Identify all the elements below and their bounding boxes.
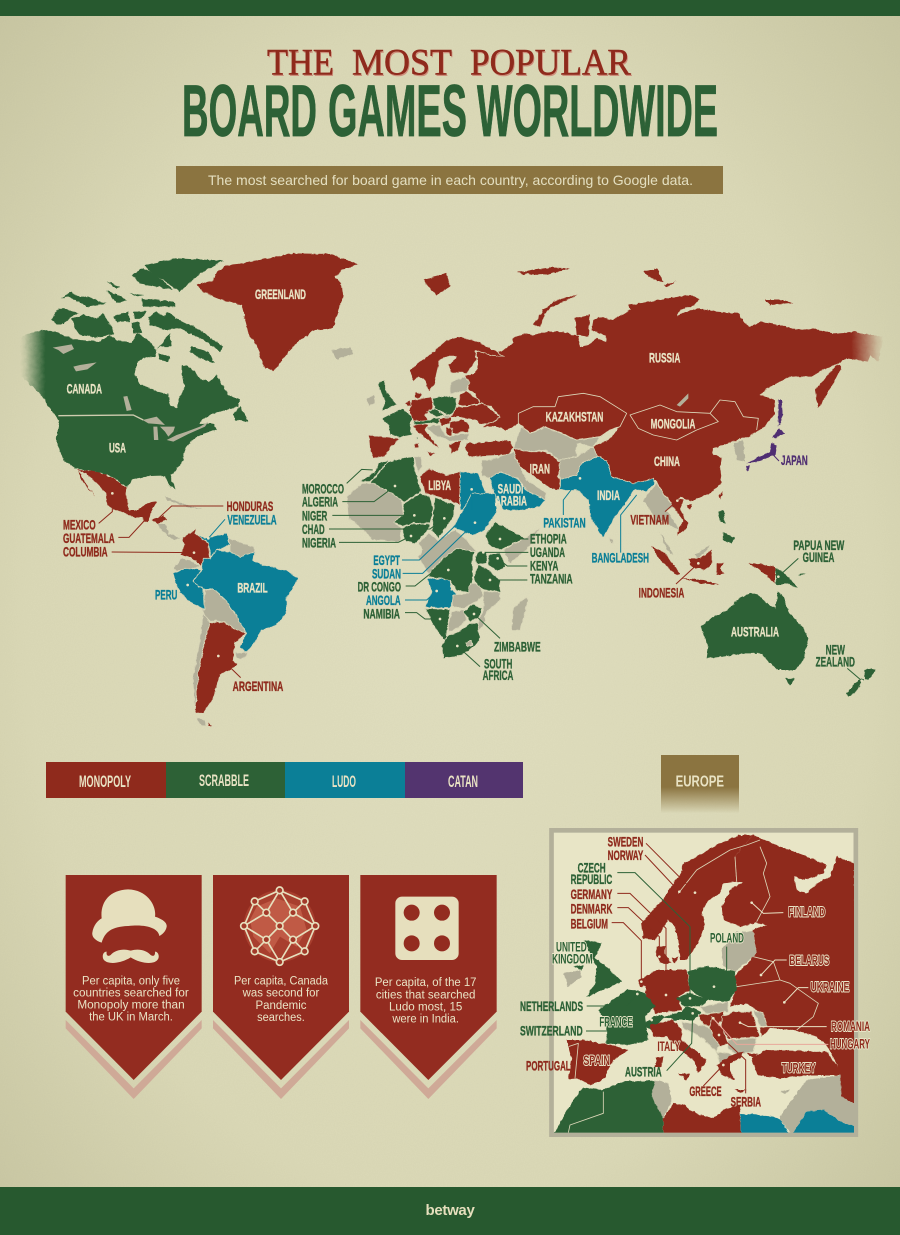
label: Algeria (302, 485, 396, 510)
label: Finland (750, 901, 825, 920)
legend: Catan: CATAN (448, 773, 478, 791)
icon: bowler hat and moustache (92, 889, 167, 963)
label: Egypt: EGYPT (373, 553, 400, 568)
legend: Scrabble (166, 762, 285, 798)
label: Libya: LIBYA (428, 478, 451, 493)
title line one (267, 42, 632, 85)
label: Poland: POLAND (710, 931, 744, 946)
title line two: GAMES (328, 71, 467, 152)
Japan (746, 400, 785, 472)
Arctic islands of Russia (517, 267, 842, 408)
label: New Zealand (816, 642, 863, 682)
banner text: countries searched for (73, 986, 189, 1000)
label: Angola (366, 590, 438, 608)
banner text (375, 975, 477, 1026)
Europe heading tab (661, 755, 739, 813)
title line one: POPULAR (471, 44, 632, 85)
banner text: Per capita, of the 17 (375, 975, 477, 989)
title line one: POPULAR (470, 42, 631, 84)
land: France (598, 990, 655, 1045)
label: Belgium (571, 916, 643, 983)
land: Belgium (638, 976, 648, 987)
label: Kenya (496, 557, 558, 573)
Europe inset (520, 755, 870, 1137)
label: Zimbabwe (473, 613, 541, 655)
land: Hungary, Romania, Serbia (698, 1012, 760, 1047)
label: Italy: ITALY (657, 1039, 680, 1054)
title line one: MOST (352, 42, 452, 84)
label: Japan (773, 453, 808, 468)
title line one: THE (267, 42, 334, 84)
legend: Catan (405, 762, 523, 798)
label: DR Congo (358, 569, 450, 595)
subtitle band (176, 166, 723, 194)
land: Sub-Saharan Africa overview (347, 483, 540, 658)
Russia, Kazakhstan, Mongolia, China (465, 295, 883, 505)
label: Pakistan: PAKISTAN (543, 516, 586, 531)
land: Tunisia (652, 1080, 672, 1118)
land: Slovakia, Balkans, Moldova (682, 1002, 767, 1063)
banner text (234, 974, 328, 1024)
label: Finland: FINLAND (788, 905, 825, 920)
Arctic islands (52, 258, 248, 422)
label: Guatemala: GUATEMALA (63, 531, 115, 546)
title line one: THE (268, 44, 335, 85)
Greenland (197, 253, 358, 372)
Central and West Asia (513, 423, 655, 544)
label: Venezuela (207, 512, 277, 540)
label: Algeria: ALGERIA (302, 495, 338, 510)
Iceland (332, 347, 353, 359)
legend: Ludo: LUDO (332, 773, 356, 791)
banner text: Per capita, Canada (234, 974, 328, 988)
land: Egypt and Saudi Arabia (741, 1110, 857, 1135)
label: Nigeria: NIGERIA (302, 536, 336, 551)
Europe land (554, 835, 857, 1135)
legend: Monopoly: MONOPOLY (79, 773, 131, 791)
label: Argentina (217, 655, 283, 694)
world map (22, 252, 882, 726)
label: Egypt (373, 488, 473, 568)
label: Chad (302, 517, 446, 537)
label: Japan: JAPAN (781, 453, 808, 468)
label: Iran: IRAN (530, 461, 550, 476)
lakes and Canada-USA border (53, 344, 208, 442)
label: Uganda (482, 545, 565, 560)
label: Saudi Arabia: SAUDI (498, 481, 523, 496)
banner: Pandemic fact (213, 875, 349, 1099)
label: Romania (739, 1019, 870, 1034)
label: Romania: ROMANIA (831, 1019, 870, 1034)
label: DR Congo: DR CONGO (358, 580, 401, 595)
label: Papua New Guinea: PAPUA NEW (793, 538, 844, 553)
banner: Monopoly fact (66, 875, 202, 1099)
label: Australia: AUSTRALIA (731, 625, 779, 640)
label: Switzerland (520, 1019, 653, 1039)
label: Bangladesh (592, 495, 649, 566)
label: Ukraine (783, 980, 849, 1004)
label: Niger (302, 508, 416, 523)
label: Mexico (63, 492, 114, 532)
label: Mexico: MEXICO (63, 517, 96, 532)
label: Portugal: PORTUGAL (526, 1058, 571, 1073)
land: Greenland, Latin America (76, 253, 450, 727)
label: Papua New Guinea (777, 538, 844, 578)
label: Ethiopia: ETHOPIA (530, 532, 567, 547)
South-East Asia (643, 440, 775, 585)
European borders (568, 840, 818, 1133)
banner text: Per capita, only five (82, 973, 180, 987)
land: Asia and Oceania (465, 267, 883, 697)
subtitle band: The most searched for board game in each country, according to Google data. (208, 172, 693, 188)
title (176, 42, 723, 194)
label: Sweden: SWEDEN (608, 835, 643, 850)
Svalbard (423, 273, 450, 295)
label: Austria (625, 1012, 694, 1080)
land: Libya (663, 1103, 741, 1135)
label: Mongolia: MONGOLIA (651, 417, 695, 432)
banner text: Ludo most, 15 (389, 999, 463, 1013)
icon: globe with network (241, 887, 319, 965)
label: Indonesia: INDONESIA (639, 585, 684, 600)
label: Denmark: DENMARK (571, 901, 612, 916)
label: Vietnam (630, 499, 679, 527)
label: France: FRANCE (599, 1015, 633, 1030)
land: Denmark (657, 947, 678, 963)
Europe frame (551, 830, 856, 1135)
South America (172, 528, 298, 727)
label: Turkey: TURKEY (782, 1060, 816, 1075)
label: Argentina: ARGENTINA (233, 679, 283, 694)
label: Serbia: SERBIA (731, 1095, 761, 1110)
banner text: the UK in March. (89, 1010, 173, 1024)
country labels: Asia, east Africa, Oceania (456, 351, 863, 683)
land: Morocco and Algeria (554, 1081, 663, 1135)
land: Switzerland, Austria, Czech Republic (643, 993, 708, 1030)
banner text: Pandemic (255, 998, 307, 1012)
label: United Kingdom: UNITED (556, 940, 587, 955)
banner text (73, 973, 189, 1024)
label: Morocco: MOROCCO (302, 481, 344, 496)
title line one: MOST (353, 44, 453, 85)
label: Hungary (712, 1017, 870, 1051)
label: Hungary: HUNGARY (830, 1036, 870, 1051)
label: Honduras (157, 499, 273, 520)
label: Vietnam: VIETNAM (630, 512, 669, 527)
land: Ireland (563, 970, 582, 987)
banner text: was second for (242, 986, 319, 1000)
label: Brazil: BRAZIL (237, 581, 268, 596)
top bar (0, 0, 900, 16)
Papua New Guinea (775, 567, 807, 588)
land: Baltic states (722, 932, 757, 972)
label: Greece: GREECE (689, 1084, 722, 1099)
label: Venezuela: VENEZUELA (227, 512, 277, 527)
label: Indonesia (639, 562, 700, 600)
label: Kenya: KENYA (530, 558, 558, 573)
land: Finland, Russia, Belarus, Ukraine (722, 835, 857, 1105)
legend: Ludo (285, 762, 405, 798)
country labels: Americas and Africa (63, 287, 476, 694)
label: Belgium: BELGIUM (571, 916, 608, 931)
footer bar with logo: betway (425, 1202, 475, 1219)
label: Bangladesh: BANGLADESH (592, 551, 649, 566)
label: Russia: RUSSIA (649, 351, 680, 366)
label: India: INDIA (597, 488, 620, 503)
label: Saudi Arabia (495, 481, 527, 509)
label: South Africa: SOUTH (484, 656, 512, 671)
land: Greece (717, 1052, 747, 1093)
legend: Scrabble: SCRABBLE (199, 772, 249, 790)
land: Turkey (747, 1050, 840, 1078)
label: Morocco (302, 469, 375, 496)
label: Peru: PERU (155, 587, 177, 602)
label: Ukraine: UKRAINE (811, 980, 849, 995)
banner text: searches. (257, 1010, 305, 1024)
label: Netherlands (520, 993, 639, 1014)
banner: Ludo fact (360, 875, 497, 1099)
label: Columbia: COLUMBIA (63, 545, 108, 560)
Australia and New Zealand (701, 592, 876, 697)
land: Germany (645, 970, 690, 1013)
label: Spain: SPAIN (583, 1053, 610, 1068)
legend (46, 762, 523, 798)
label: South Africa (456, 645, 513, 683)
label: Greenland: GREENLAND (255, 287, 306, 302)
label: Honduras: HONDURAS (227, 499, 273, 514)
label: Tanzania: TANZANIA (530, 572, 573, 587)
label: Belarus: BELARUS (789, 953, 829, 968)
label: Namibia: NAMIBIA (363, 606, 400, 621)
label: USA: USA (109, 440, 126, 455)
banner text: were in India. (391, 1012, 459, 1026)
label: Greece (689, 1064, 725, 1099)
label: Angola: ANGOLA (366, 593, 401, 608)
label: Niger: NIGER (302, 508, 327, 523)
label: Kazakhstan: KAZAKHSTAN (546, 410, 603, 425)
label: United Kingdom: KINGDOM (552, 952, 593, 967)
label: Sudan: SUDAN (372, 566, 401, 581)
label: New Zealand: NEW (826, 642, 845, 657)
land: Sweden and Norway (642, 835, 753, 960)
label: Nigeria (302, 535, 412, 551)
icon: dice (395, 897, 459, 960)
country borders in Asia (518, 393, 758, 440)
label: United Kingdom (552, 940, 593, 967)
land: Italy (650, 1020, 707, 1080)
label: Sweden (608, 835, 696, 894)
label: Netherlands: NETHERLANDS (520, 999, 583, 1014)
Europe heading tab: EUROPE (676, 774, 724, 791)
label: Chad: CHAD (302, 522, 325, 537)
label: Germany (571, 887, 667, 996)
land: Europe, Middle East, North Africa overview (360, 337, 547, 510)
label: Norway: NORWAY (608, 848, 643, 863)
title line two: BOARD (182, 71, 317, 152)
land: United Kingdom (573, 940, 622, 997)
label: Sudan (372, 521, 476, 581)
label: Uganda: UGANDA (530, 545, 565, 560)
label: Guatemala (63, 520, 145, 546)
label: Austria: AUSTRIA (625, 1065, 662, 1080)
label: Saudi Arabia: ARABIA (495, 494, 527, 509)
label: Papua New Guinea: GUINEA (803, 550, 834, 565)
label: Zimbabwe: ZIMBABWE (494, 640, 541, 655)
banner text: Monopoly more than (77, 998, 185, 1012)
label: Ethiopia (499, 532, 567, 547)
Lake Baikal (677, 393, 688, 407)
label: Norway (608, 848, 681, 893)
legend: Monopoly (46, 762, 166, 798)
label: Czech Republic: CZECH (578, 860, 606, 875)
Europe labels (520, 835, 870, 1110)
Mexico and Central America (76, 469, 203, 540)
label: New Zealand: ZEALAND (816, 654, 855, 669)
land: Poland (688, 966, 737, 1002)
label: South Africa: AFRICA (483, 668, 513, 683)
label: Czech Republic (571, 860, 691, 1000)
label: Belarus (760, 953, 829, 976)
label: Pakistan (543, 477, 586, 531)
label: Germany: GERMANY (571, 887, 612, 902)
label: Canada: CANADA (67, 381, 102, 396)
land: Spain and Portugal (567, 1040, 628, 1085)
title line two (182, 71, 718, 152)
Canada and USA mainland (20, 330, 240, 489)
label: China: CHINA (654, 454, 680, 469)
label: Poland (710, 931, 744, 988)
label: Serbia (718, 1034, 761, 1110)
label: Columbia (63, 545, 195, 560)
land: Middle East (780, 1075, 857, 1135)
label: Czech Republic: REPUBLIC (571, 872, 612, 887)
label: Denmark (571, 901, 661, 958)
footer bar with logo (0, 1187, 900, 1235)
label: Tanzania (489, 572, 573, 587)
label: Switzerland: SWITZERLAND (520, 1024, 583, 1039)
land: North America (20, 258, 248, 489)
banner text: cities that searched (376, 987, 475, 1001)
